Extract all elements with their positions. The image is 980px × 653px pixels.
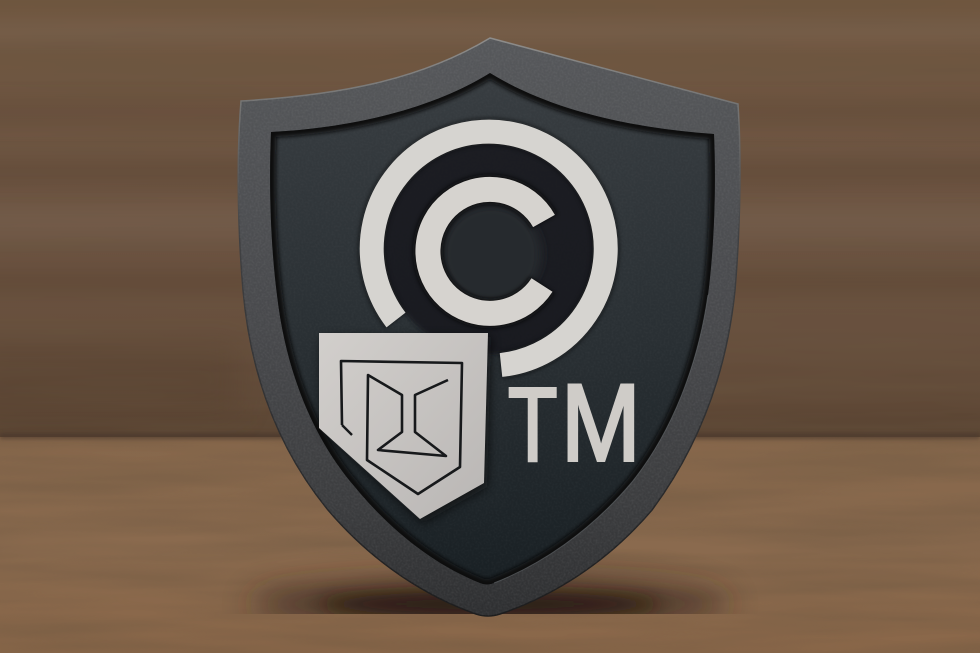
shield recessed panel xyxy=(265,70,720,590)
shield rim xyxy=(230,30,750,620)
small shield badge xyxy=(319,333,491,523)
icon: copyright symbol xyxy=(372,132,606,365)
wooden table surface xyxy=(0,433,980,653)
badge inner outline xyxy=(341,361,462,494)
shield cast shadow xyxy=(250,580,730,628)
copyright letter shape shadow xyxy=(428,189,544,313)
trademark text xyxy=(508,361,641,484)
trademark text: M xyxy=(561,361,641,484)
copyright letter shape xyxy=(428,189,544,313)
copyright centre disc xyxy=(441,204,541,304)
copyright ring xyxy=(372,132,606,365)
trademark text: T xyxy=(508,365,557,483)
wooden wall background xyxy=(0,0,980,437)
copyright ring shadow xyxy=(372,132,606,365)
copyright dark interior xyxy=(383,142,595,354)
panel lower edge highlight xyxy=(494,295,708,583)
shield xyxy=(230,30,750,620)
badge inner corner xyxy=(342,425,352,435)
